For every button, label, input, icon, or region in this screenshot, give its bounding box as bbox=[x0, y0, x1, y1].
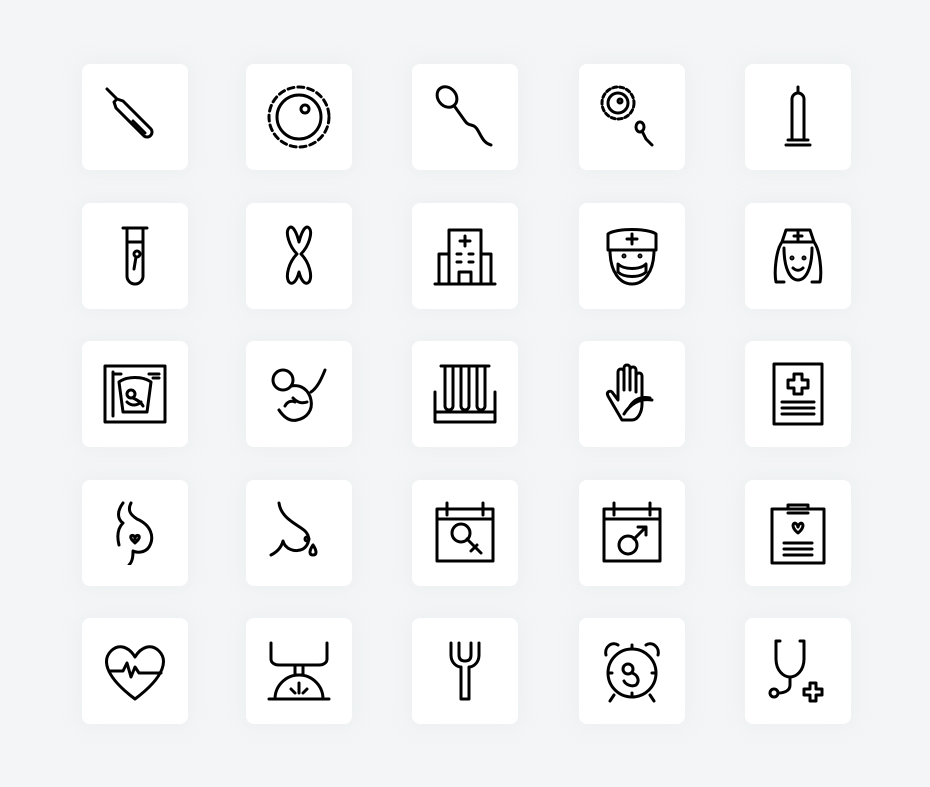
tile: hands bbox=[579, 341, 685, 447]
tile: thermometer bbox=[82, 64, 188, 170]
tile: egg cell bbox=[246, 64, 352, 170]
tile: clipboard heart bbox=[745, 480, 851, 586]
tile: sperm bbox=[412, 64, 518, 170]
tile: ultrasound bbox=[82, 341, 188, 447]
tile: alarm clock fetus bbox=[579, 618, 685, 724]
tile: calendar female bbox=[412, 480, 518, 586]
tile: heartbeat bbox=[82, 618, 188, 724]
tile: condom bbox=[745, 64, 851, 170]
tile: test tubes rack bbox=[412, 341, 518, 447]
tile: doctor bbox=[579, 203, 685, 309]
tile: medical report bbox=[745, 341, 851, 447]
tile: baby scale bbox=[246, 618, 352, 724]
tile: breastfeeding bbox=[246, 480, 352, 586]
tile: hospital bbox=[412, 203, 518, 309]
tile: fertilization bbox=[579, 64, 685, 170]
tile: fetus bbox=[246, 341, 352, 447]
tile: nurse bbox=[745, 203, 851, 309]
tile: calendar male bbox=[579, 480, 685, 586]
tile: chromosome bbox=[246, 203, 352, 309]
tile: stethoscope bbox=[745, 618, 851, 724]
tile: pregnant bbox=[82, 480, 188, 586]
tile: uterus bbox=[412, 618, 518, 724]
tile: test tube bbox=[82, 203, 188, 309]
